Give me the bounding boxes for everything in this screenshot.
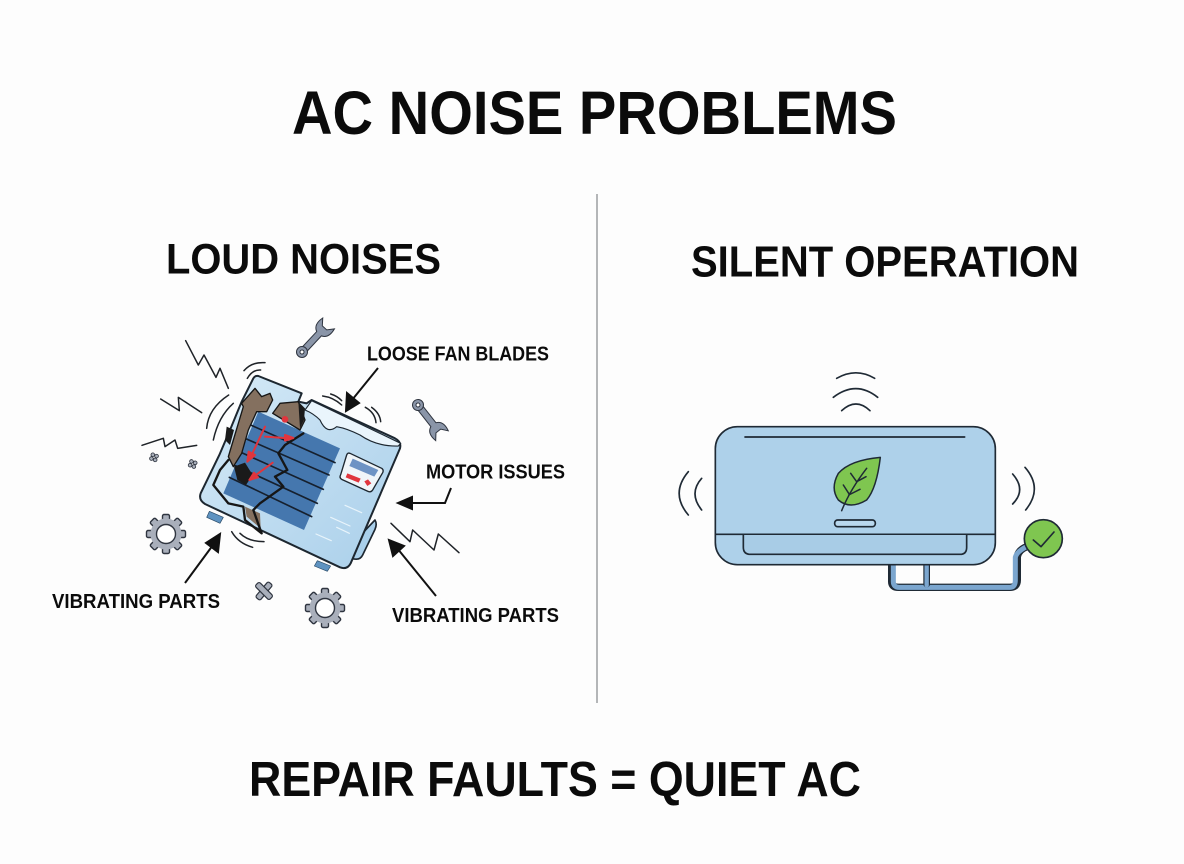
control panel — [340, 453, 383, 492]
coil panel — [223, 412, 340, 530]
arrow: motor issues — [398, 488, 451, 509]
illustration: quiet AC unit — [679, 373, 1062, 587]
indicator — [835, 520, 875, 527]
heading: loud noises: LOUD NOISES — [166, 236, 441, 284]
arrow: vibrating parts left — [185, 534, 220, 583]
illustration: damaged AC unit — [142, 341, 459, 571]
vibration arcs — [207, 363, 381, 547]
icon: wrench top — [292, 318, 335, 362]
arrow: vibrating parts right — [389, 540, 436, 596]
top line — [745, 434, 965, 439]
divider — [596, 194, 598, 703]
pipes — [892, 547, 1027, 587]
arrow: loose fan blades — [346, 368, 378, 411]
label: vibrating parts right: VIBRATING PARTS — [392, 605, 559, 627]
unit body — [715, 427, 995, 565]
unit body — [200, 376, 400, 568]
sound waves — [679, 373, 1034, 515]
feet — [207, 511, 331, 571]
icon: gear left — [146, 514, 186, 554]
flap — [743, 535, 967, 554]
label: vibrating parts left: VIBRATING PARTS — [52, 591, 220, 613]
vent highlights — [316, 505, 362, 541]
crack — [213, 433, 303, 533]
side bracket — [343, 520, 376, 559]
check badge — [1024, 520, 1062, 558]
coil fins — [229, 425, 335, 517]
small fan icons — [149, 452, 198, 469]
icon: wrench right — [408, 395, 449, 441]
bottom seam — [715, 532, 995, 537]
label: loose fan blades: LOOSE FAN BLADES — [367, 344, 549, 366]
rust damage — [228, 388, 273, 467]
frost band — [305, 401, 401, 446]
red damage marks — [247, 417, 293, 480]
icon: gear bottom — [306, 588, 344, 628]
title: AC NOISE PROBLEMS — [292, 79, 897, 147]
icon: leaf — [834, 457, 880, 511]
icon: cross bolts — [255, 581, 273, 601]
heading: silent operation: SILENT OPERATION — [691, 238, 1079, 286]
footer message: REPAIR FAULTS = QUIET AC — [249, 753, 861, 807]
label: motor issues: MOTOR ISSUES — [426, 462, 565, 484]
lightning bolts — [142, 341, 459, 553]
